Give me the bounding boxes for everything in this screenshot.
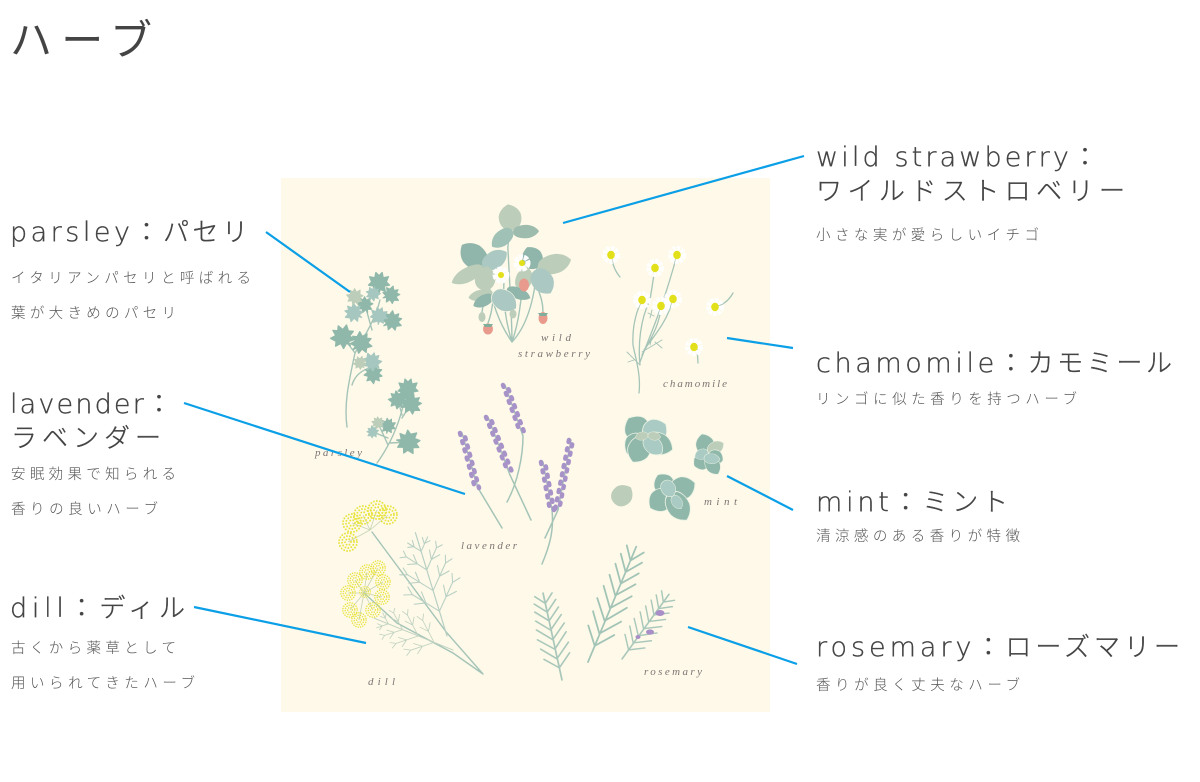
heading: rosemary：ローズマリー	[816, 632, 1180, 663]
text block: wild strawberry	[816, 142, 1125, 245]
description: 小さな実が愛らしいイチゴ	[816, 224, 1039, 245]
leader line: dill	[194, 607, 366, 643]
heading	[816, 142, 1125, 207]
heading: parsley：パセリ	[10, 217, 248, 248]
text block: parsley	[10, 217, 251, 323]
leader line: rosemary	[688, 627, 797, 664]
label: wild	[541, 332, 572, 344]
illustration: chamomile	[605, 249, 733, 393]
leader line: mint	[727, 476, 793, 510]
panel background	[281, 178, 770, 712]
label: dill	[368, 676, 395, 688]
heading: chamomile：カモミール	[816, 348, 1172, 379]
heading: ラベンダー	[11, 424, 161, 454]
heading: mint：ミント	[816, 487, 1008, 518]
title: ハーブ	[10, 7, 152, 68]
description: 香りの良いハーブ	[11, 498, 158, 519]
leader line: wild strawberry	[563, 156, 804, 223]
heading: dill：ディル	[10, 593, 185, 624]
illustration: dill	[339, 501, 483, 688]
description: 清涼感のある香りが特徴	[816, 525, 1020, 546]
description: リンゴに似た香りを持つハーブ	[816, 388, 1077, 409]
label: mint	[704, 496, 738, 508]
text block: lavender	[10, 389, 176, 519]
heading: ワイルドストロベリー	[816, 177, 1125, 207]
panel: herb illustration	[281, 178, 770, 712]
heading	[10, 389, 172, 454]
flowers	[495, 257, 528, 281]
description	[11, 463, 176, 519]
label: strawberry	[518, 348, 590, 360]
text block: chamomile	[816, 348, 1172, 409]
label	[518, 332, 590, 360]
illustration: mint	[607, 410, 738, 526]
description	[11, 637, 195, 693]
text block: mint	[816, 487, 1020, 546]
text block: dill	[10, 593, 195, 693]
leader line: lavender	[184, 403, 465, 494]
illustration: rosemary	[528, 540, 702, 683]
heading: lavender：	[10, 389, 172, 420]
leader line: chamomile	[727, 338, 793, 348]
label: chamomile	[663, 378, 727, 390]
illustration: parsley	[314, 272, 424, 463]
text block: rosemary	[816, 632, 1180, 695]
leader line: parsley	[266, 232, 350, 292]
description: 葉が大きめのパセリ	[11, 302, 176, 323]
label: parsley	[314, 447, 362, 459]
heading: wild strawberry：	[816, 142, 1098, 173]
description: 香りが良く丈夫なハーブ	[816, 674, 1020, 695]
illustration: lavender	[460, 385, 573, 564]
label: rosemary	[644, 666, 702, 678]
description: イタリアンパセリと呼ばれる	[11, 267, 251, 288]
label: lavender	[461, 540, 518, 552]
description	[11, 267, 251, 323]
berries	[478, 278, 548, 334]
description: 用いられてきたハーブ	[11, 672, 195, 693]
description: 古くから薬草として	[11, 637, 176, 658]
illustration: wild strawberry	[449, 203, 590, 360]
description: 安眠効果で知られる	[11, 463, 176, 484]
